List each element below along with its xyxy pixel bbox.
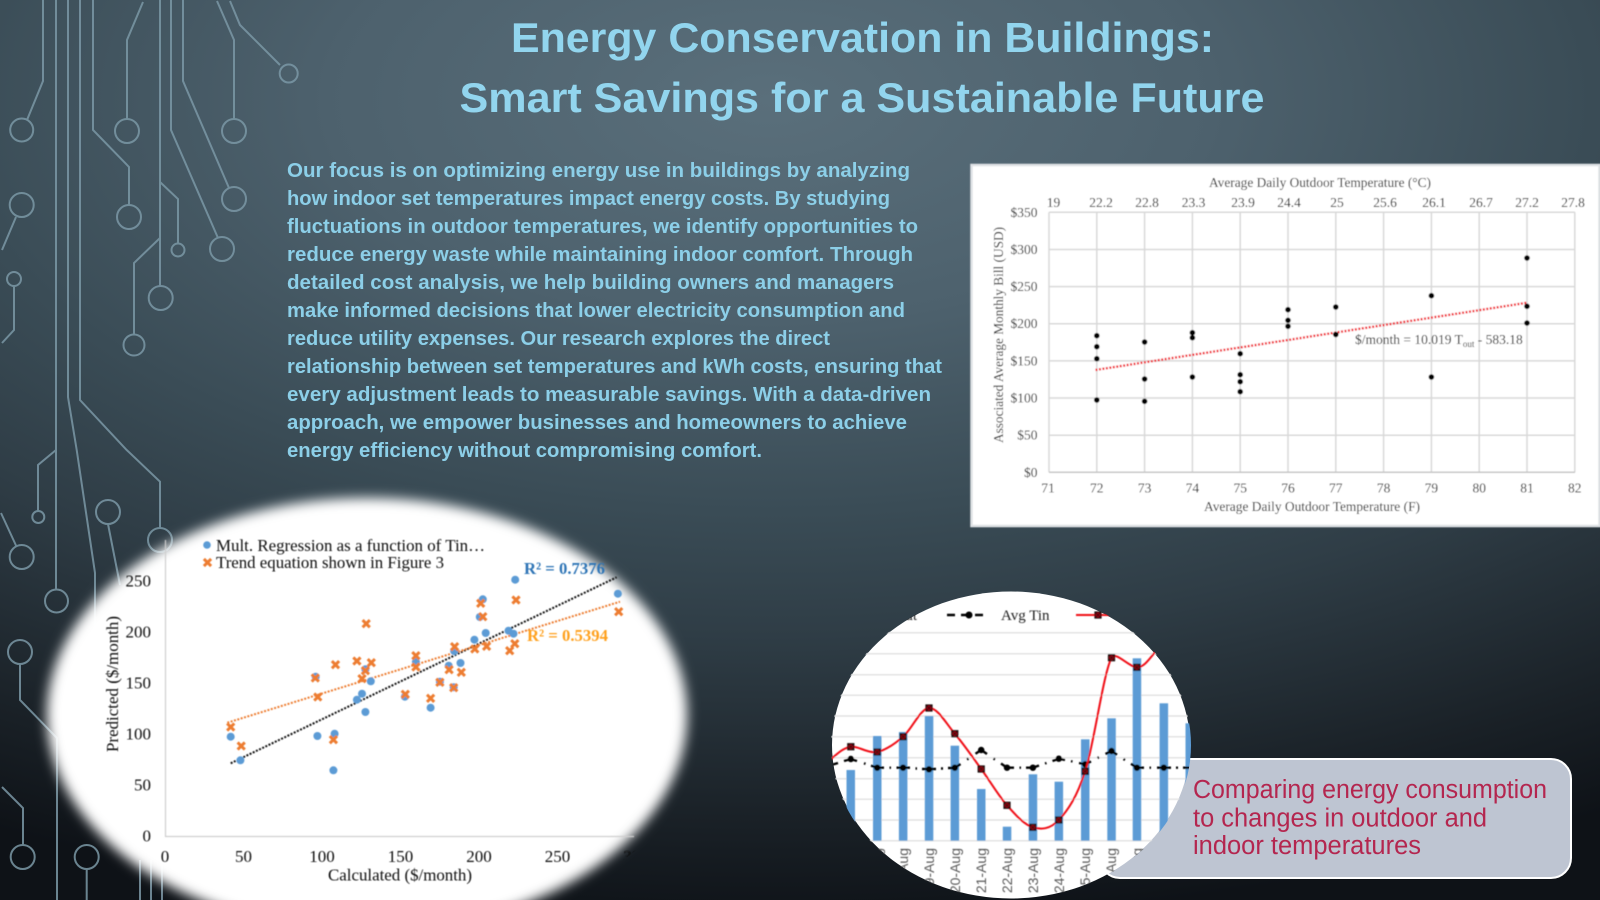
data points: bill vs temperature xyxy=(1094,255,1530,404)
trend equation: out xyxy=(1463,339,1475,349)
panel: predicted vs calculated scatter on soft white ellipse xyxy=(47,498,687,900)
callout text: Comparing energy consumption xyxy=(1193,776,1547,804)
y axis labels: 100 xyxy=(126,724,151,744)
trend equation: - 583.18 xyxy=(1474,332,1523,347)
y axis labels: 0 xyxy=(142,826,151,846)
top axis: Celsius: 26.7 xyxy=(1469,195,1493,210)
orange trend equation points xyxy=(227,596,622,750)
energy bars xyxy=(846,658,1194,841)
intro text block: energy efficiency without compromising comfort. xyxy=(287,440,762,462)
intro text block: relationship between set temperatures and kWh costs, ensuring that xyxy=(287,356,942,378)
x axis labels: 0 xyxy=(161,847,169,866)
top axis: Celsius: 27.2 xyxy=(1515,195,1539,210)
intro text block: make informed decisions that lower electricity consumption and xyxy=(287,300,905,322)
avg indoor temperature line xyxy=(833,747,1190,772)
blue regression points xyxy=(227,576,622,774)
intro text block: approach, we empower businesses and homeowners to achieve xyxy=(287,412,907,434)
left axis: monthly bill: $150 xyxy=(1010,354,1038,368)
x axis labels: 100 xyxy=(309,847,335,866)
x axis labels xyxy=(161,847,649,884)
top axis: Celsius: 22.8 xyxy=(1135,195,1159,210)
bottom axis: Fahrenheit: 81 xyxy=(1520,480,1534,496)
date tick labels: 23-Aug xyxy=(1025,848,1041,893)
R-squared labels: R² = 0.5394 xyxy=(527,626,608,645)
intro text block: detailed cost analysis, we help building owners and managers xyxy=(287,272,894,294)
date tick labels: 20-Aug xyxy=(947,848,963,893)
x axis labels: 300 xyxy=(623,847,649,866)
date tick labels xyxy=(869,848,1145,893)
x axis labels: 200 xyxy=(466,847,492,866)
left axis: monthly bill: $350 xyxy=(1010,205,1038,220)
top axis: Celsius: 25 xyxy=(1330,195,1344,210)
left axis: monthly bill: Associated Average Monthly Bill (USD) xyxy=(991,227,1006,443)
date tick labels: 18-Aug xyxy=(895,848,911,893)
title: Smart Savings for a Sustainable Future xyxy=(460,74,1264,121)
bottom axis: Fahrenheit: 74 xyxy=(1186,480,1199,496)
top axis: Celsius: Average Daily Outdoor Temperature (°C) xyxy=(1209,175,1431,190)
left axis: monthly bill: $0 xyxy=(1024,465,1038,480)
intro text block: reduce utility expenses. Our research explores the direct xyxy=(287,328,830,350)
left axis: monthly bill: $100 xyxy=(1010,390,1038,406)
y axis labels: 250 xyxy=(126,572,151,590)
top axis: Celsius: 26.1 xyxy=(1422,195,1446,210)
y axis labels: 50 xyxy=(134,776,151,794)
y axis labels: 150 xyxy=(126,674,151,692)
circuit trace decoration xyxy=(1,0,298,900)
bottom axis: Fahrenheit: 77 xyxy=(1329,480,1343,496)
y axis labels: Predicted ($/month) xyxy=(103,616,122,752)
date tick labels: 21-Aug xyxy=(973,848,989,893)
bottom axis: Fahrenheit: 75 xyxy=(1233,480,1247,496)
legend xyxy=(203,536,485,572)
callout text: to changes in outdoor and xyxy=(1193,804,1487,832)
callout text: indoor temperatures xyxy=(1193,832,1421,860)
x axis labels: Calculated ($/month) xyxy=(328,866,472,884)
y axis labels: 200 xyxy=(126,622,151,642)
legend: Mult. Regression as a function of Tin… xyxy=(216,536,485,555)
intro text block: fluctuations in outdoor temperatures, we identify opportunities to xyxy=(287,216,918,238)
bottom axis: Fahrenheit: 80 xyxy=(1472,480,1486,496)
title: Energy Conservation in Buildings: xyxy=(511,14,1214,61)
R-squared labels: R² = 0.7376 xyxy=(524,559,605,578)
date tick labels: 25-Aug xyxy=(1077,848,1093,893)
outdoor temperature line xyxy=(830,651,1156,830)
bottom axis: Fahrenheit: 72 xyxy=(1090,480,1104,496)
left axis: monthly bill: $200 xyxy=(1010,316,1038,331)
left axis: monthly bill: $50 xyxy=(1017,428,1038,442)
chart legend xyxy=(906,610,1110,624)
top axis: Celsius: 27.8 xyxy=(1561,195,1585,210)
panel: monthly bill vs outdoor temperature chart xyxy=(972,165,1600,526)
bottom axis: Fahrenheit: 78 xyxy=(1377,480,1391,496)
y axis labels xyxy=(103,572,151,846)
top axis: Celsius: 22.2 xyxy=(1089,195,1113,210)
bottom axis: Fahrenheit xyxy=(1041,480,1582,514)
bottom axis: Fahrenheit: 76 xyxy=(1281,480,1295,496)
trend equation: $/month = 10.019 T xyxy=(1355,332,1463,347)
intro text block xyxy=(287,160,942,462)
date tick labels: 27-Aug xyxy=(1129,848,1145,893)
bottom axis: Fahrenheit: 73 xyxy=(1138,480,1152,496)
chart legend: Avg Tout xyxy=(862,608,918,624)
bottom axis: Fahrenheit: 79 xyxy=(1425,480,1438,496)
intro text block: how indoor set temperatures impact energy costs. By studying xyxy=(287,188,890,210)
intro text block: every adjustment leads to measurable savings. With a data-driven xyxy=(287,384,931,406)
panel: temperature and energy chart in round lens xyxy=(820,592,1200,898)
x axis labels: 150 xyxy=(388,847,413,866)
top axis: Celsius: 25.6 xyxy=(1373,195,1397,210)
R-squared labels xyxy=(524,559,608,645)
callout box xyxy=(1100,759,1571,878)
date tick labels: 19-Aug xyxy=(921,848,937,893)
title xyxy=(460,14,1264,121)
left axis: monthly bill: $300 xyxy=(1010,242,1038,257)
top axis: Celsius: 23.9 xyxy=(1231,195,1255,210)
intro text block: Our focus is on optimizing energy use in buildings by analyzing xyxy=(287,160,910,182)
intro text block: reduce energy waste while maintaining indoor comfort. Through xyxy=(287,244,913,266)
trend line: bill vs temperature xyxy=(1096,303,1527,370)
top axis: Celsius: 24.4 xyxy=(1277,195,1301,210)
left axis: monthly bill: $250 xyxy=(1010,279,1038,294)
date tick labels: 17-Aug xyxy=(869,848,885,893)
top axis: Celsius xyxy=(1047,175,1585,210)
chart legend: Avg Tin xyxy=(1001,608,1050,624)
trend lines xyxy=(227,577,620,763)
x axis labels: 250 xyxy=(545,847,570,866)
x axis labels: 50 xyxy=(235,847,252,866)
date tick labels: 22-Aug xyxy=(999,848,1015,893)
left axis: monthly bill xyxy=(991,205,1038,480)
date tick labels: 24-Aug xyxy=(1051,848,1067,893)
callout text xyxy=(1193,776,1547,860)
bottom axis: Fahrenheit: 71 xyxy=(1041,480,1055,496)
top axis: Celsius: 23.3 xyxy=(1182,195,1206,210)
bottom axis: Fahrenheit: Average Daily Outdoor Temperature (F) xyxy=(1204,499,1420,514)
legend: Trend equation shown in Figure 3 xyxy=(216,553,444,572)
date tick labels: 26-Aug xyxy=(1103,848,1119,893)
top axis: Celsius: 19 xyxy=(1047,195,1060,210)
bottom axis: Fahrenheit: 82 xyxy=(1568,480,1582,496)
